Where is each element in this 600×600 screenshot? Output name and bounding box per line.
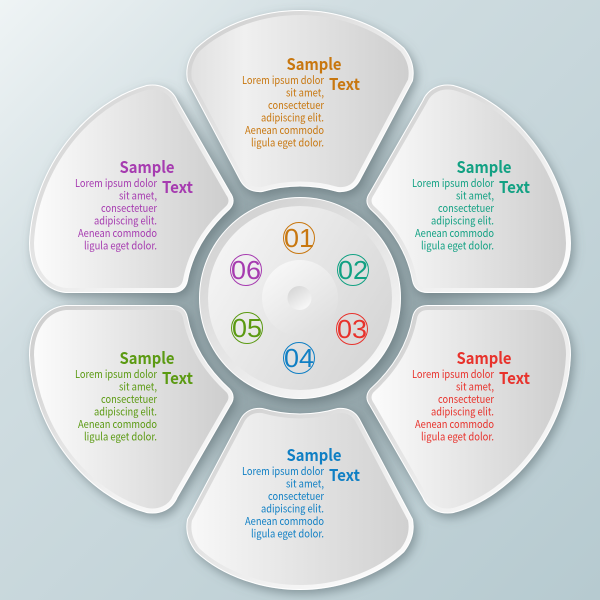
text block: upper right petal: Text — [499, 174, 530, 198]
text block: bottom petal: Aenean commodo — [245, 513, 324, 529]
panel: upper left petal — [32, 88, 230, 290]
text block: lower left petal — [75, 345, 193, 444]
text block: upper right petal: sit amet, — [456, 188, 494, 204]
text block: top petal: Aenean commodo — [245, 122, 324, 138]
central disc — [199, 197, 401, 399]
text block: lower right petal: Lorem ipsum dolor — [412, 366, 495, 382]
text block: upper left petal — [75, 154, 193, 254]
text block: upper right petal: consectetuer — [438, 200, 495, 216]
text block: upper right petal: Sample — [456, 154, 512, 178]
panel: lower left petal — [32, 308, 230, 510]
text block: lower left petal: sit amet, — [119, 378, 157, 394]
text block: bottom petal: sit amet, — [286, 476, 324, 492]
text block: lower left petal: Lorem ipsum dolor — [75, 366, 158, 382]
text block: lower right petal: consectetuer — [438, 391, 495, 407]
text block: lower left petal: ligula eget dolor. — [84, 428, 157, 444]
text block: bottom petal: Lorem ipsum dolor — [242, 463, 325, 479]
text block: lower right petal: sit amet, — [456, 378, 494, 394]
text block: bottom petal: adipiscing elit. — [261, 500, 324, 516]
text block: bottom petal: Text — [329, 462, 360, 486]
text block: upper left petal: Sample — [120, 154, 174, 178]
text block: upper right petal: adipiscing elit. — [431, 212, 494, 228]
text block: bottom petal: consectetuer — [268, 488, 325, 504]
text block: bottom petal: ligula eget dolor. — [251, 526, 324, 542]
text block: bottom petal — [242, 442, 360, 542]
text block: top petal: adipiscing elit. — [261, 110, 324, 126]
text block: lower left petal: Text — [162, 365, 193, 389]
text block: lower right petal — [412, 345, 530, 444]
text block: top petal — [242, 51, 360, 150]
text block: top petal: consectetuer — [268, 97, 325, 113]
text block: upper left petal: Aenean commodo — [78, 225, 157, 241]
text block: upper left petal: ligula eget dolor. — [84, 238, 157, 254]
panel: bottom petal — [189, 411, 411, 587]
number badge 05: 05 — [232, 313, 262, 343]
text block: top petal: sit amet, — [286, 84, 324, 100]
number badge 02: 02 — [338, 255, 368, 285]
number badge 04: 04 — [284, 343, 314, 373]
text block: lower left petal: Aenean commodo — [78, 416, 157, 432]
text block: upper right petal — [412, 154, 530, 254]
text block: lower left petal: adipiscing elit. — [94, 404, 157, 420]
text block: upper right petal: Aenean commodo — [415, 225, 494, 241]
text block: top petal: Lorem ipsum dolor — [242, 72, 325, 88]
text block: upper right petal: Lorem ipsum dolor — [412, 175, 495, 191]
number badge 01: 01 — [284, 223, 314, 253]
panel: upper right petal — [370, 88, 568, 290]
text block: lower right petal: Aenean commodo — [415, 416, 494, 432]
text block: lower right petal: Text — [499, 365, 530, 389]
text block: lower right petal: adipiscing elit. — [431, 404, 494, 420]
text block: top petal: Sample — [286, 51, 342, 75]
text block: lower right petal: Sample — [456, 345, 512, 369]
text block: upper left petal: Lorem ipsum dolor — [75, 175, 158, 191]
text block: upper right petal: ligula eget dolor. — [421, 238, 494, 254]
text block: lower left petal: consectetuer — [101, 391, 158, 407]
text block: top petal: ligula eget dolor. — [251, 134, 324, 150]
number badge 03: 03 — [337, 314, 367, 344]
text block: lower right petal: ligula eget dolor. — [421, 428, 494, 444]
text block: upper left petal: Text — [162, 174, 193, 198]
number badge 06: 06 — [231, 255, 261, 285]
panel: top petal — [189, 13, 411, 189]
text block: lower left petal: Sample — [120, 345, 174, 369]
text block: upper left petal: adipiscing elit. — [94, 212, 157, 228]
text block: upper left petal: sit amet, — [119, 188, 157, 204]
text block: upper left petal: consectetuer — [101, 200, 158, 216]
text block: bottom petal: Sample — [286, 442, 342, 466]
text block: top petal: Text — [329, 71, 360, 95]
panel: lower right petal — [370, 308, 568, 510]
